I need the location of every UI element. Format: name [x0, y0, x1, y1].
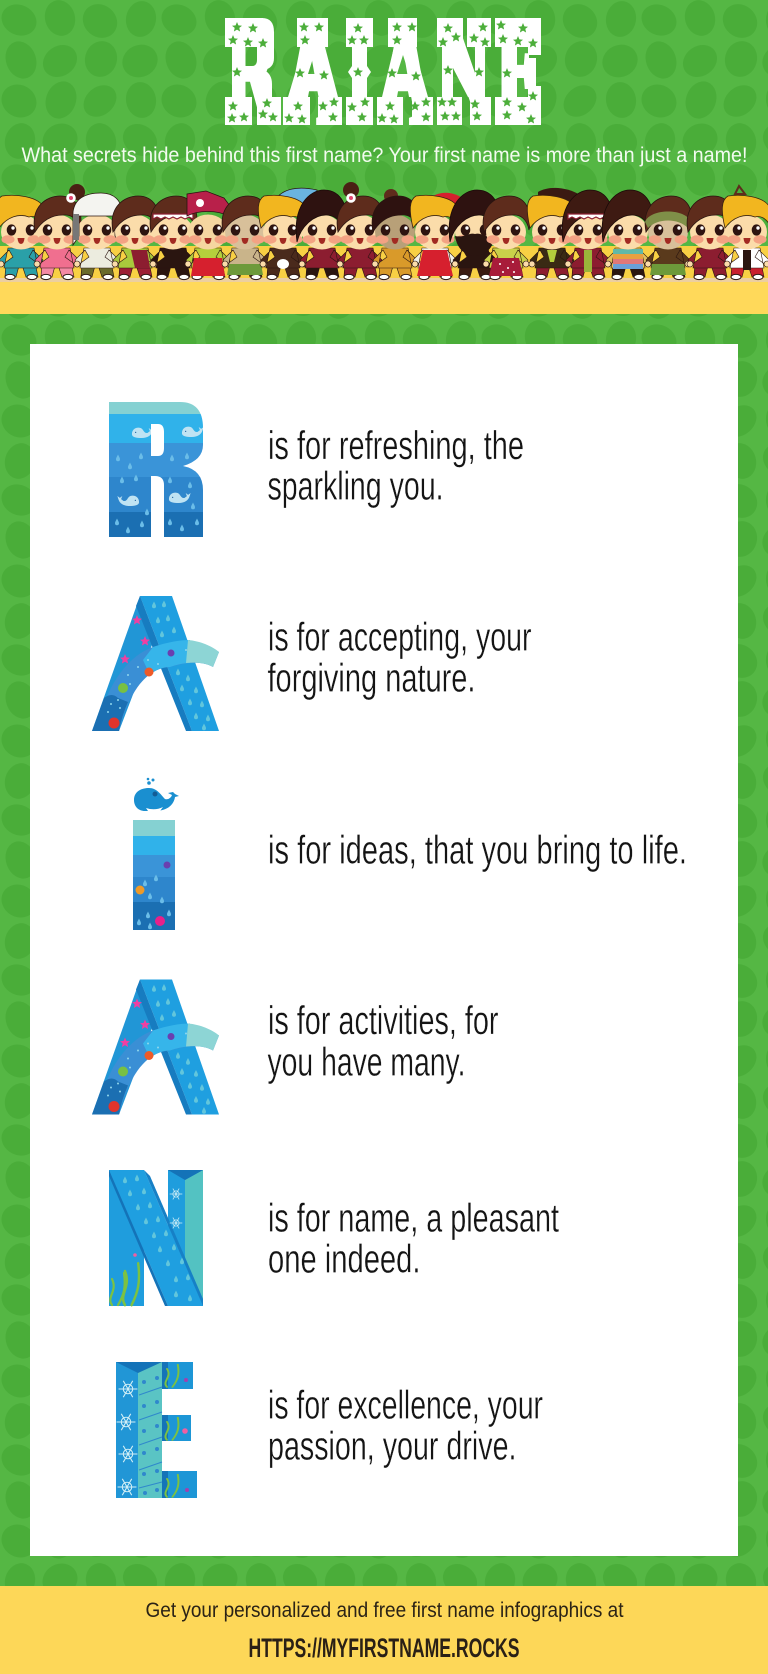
child 8 [258, 188, 317, 280]
child 19 [687, 196, 734, 280]
letter A [92, 596, 219, 731]
text: N: one indeed. [268, 1238, 420, 1282]
icon: whale [134, 778, 179, 811]
child 6 [185, 191, 231, 280]
letter A (second) [92, 980, 219, 1114]
letter N [109, 1170, 203, 1306]
child 13 [449, 190, 501, 280]
child 4 [112, 196, 159, 280]
text: N: is for name, a pleasant [268, 1196, 559, 1240]
text: N [268, 1196, 559, 1282]
letter E [116, 1362, 197, 1498]
child 5 [150, 196, 197, 280]
child 14 [483, 196, 530, 280]
child 1 [0, 195, 46, 280]
raindrops [115, 452, 199, 533]
whales [117, 427, 204, 506]
child 11 [372, 189, 419, 280]
text: E: passion, your drive. [268, 1424, 516, 1468]
child 9 [296, 190, 348, 280]
letter I with whale [133, 778, 179, 930]
child 10 [337, 182, 384, 280]
letter R [109, 402, 204, 537]
text: R: is for refreshing, the [268, 424, 524, 468]
title: RAIANE [225, 18, 541, 125]
child 16 [562, 190, 614, 280]
text: A [268, 616, 532, 700]
child 20 [722, 186, 768, 280]
child 2 [34, 184, 85, 280]
child 15 [527, 188, 586, 280]
row of cartoon children [0, 182, 768, 280]
text: R [268, 424, 524, 508]
yellow band behind characters [0, 246, 768, 314]
text: E [268, 1384, 543, 1468]
text: A second: you have many. [268, 1040, 466, 1084]
child 7 [222, 196, 269, 280]
child 18 [645, 196, 692, 280]
text: A: forgiving nature. [268, 656, 476, 700]
text: E: is for excellence, your [268, 1384, 543, 1428]
footer line: Get your personalized and free first name infographics at [146, 1599, 624, 1622]
text: A: is for accepting, your [268, 616, 532, 660]
text: A second: is for activities, for [268, 999, 498, 1043]
white main panel [30, 344, 738, 1556]
text: A second [268, 999, 498, 1084]
child 3 [73, 193, 121, 280]
child 12 [410, 193, 465, 280]
footer band [0, 1586, 768, 1674]
child 17 [602, 190, 654, 280]
text: R: sparkling you. [268, 464, 444, 508]
footer url: HTTPS://MYFIRSTNAME.ROCKS [248, 1633, 520, 1663]
